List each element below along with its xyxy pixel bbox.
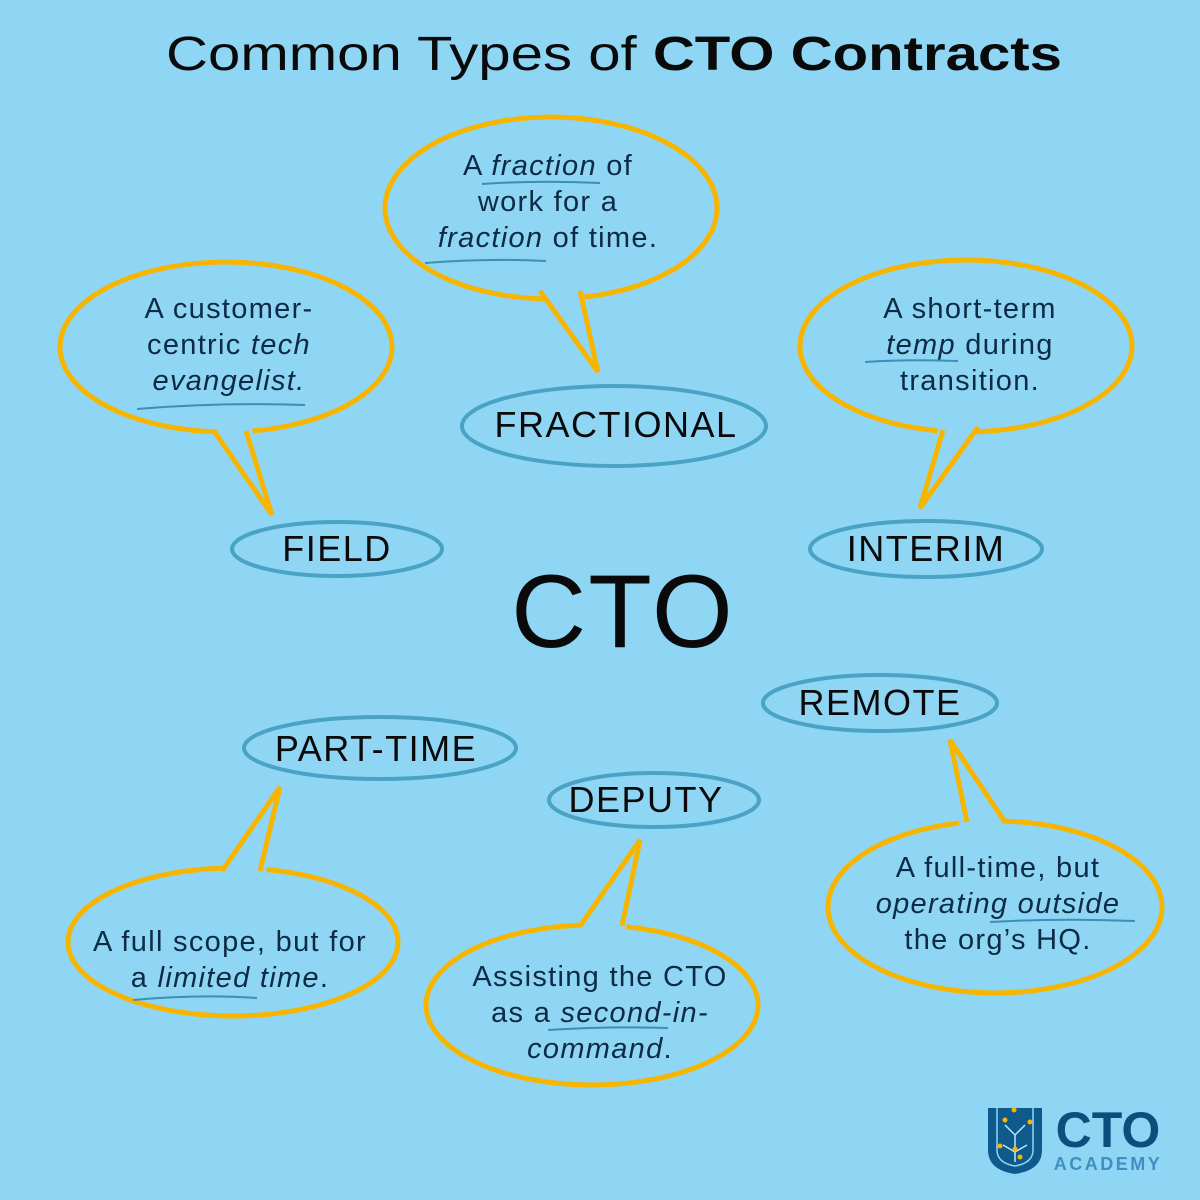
bubble: deputy: Assisting the CTO [472, 961, 728, 993]
label: FIELD [232, 522, 442, 576]
bubble: fractional: fraction of time. [438, 222, 658, 254]
bubble: remote: the org’s HQ. [904, 924, 1092, 956]
title: Common Types of CTO Contracts [166, 28, 1062, 81]
bubble: deputy [426, 840, 758, 1085]
label: FRACTIONAL [462, 386, 766, 466]
bubble: fractional [385, 117, 717, 372]
logo: CTO Academy: CTO [1056, 1102, 1160, 1158]
bubble: interim [800, 260, 1132, 508]
label: INTERIM: INTERIM [847, 528, 1005, 569]
bubble: interim: transition. [900, 365, 1040, 397]
label: INTERIM [810, 521, 1042, 577]
bubble: field: evangelist. [153, 365, 305, 397]
bubble: field: centric tech [147, 329, 311, 361]
bubble: fractional: A fraction of [463, 150, 633, 182]
bubble: interim: A short-term [883, 293, 1057, 325]
bubble: remote: A full-time, but [896, 852, 1100, 884]
label: PART-TIME [244, 717, 516, 779]
label: DEPUTY [549, 773, 759, 827]
logo: CTO Academy [988, 1102, 1162, 1174]
logo: CTO Academy: ACADEMY [1054, 1154, 1162, 1174]
label: PART-TIME: PART-TIME [275, 728, 477, 769]
bubble: part-time: a limited time. [131, 962, 329, 994]
bubble: fractional: work for a [477, 186, 618, 218]
bubble: remote: operating outside [876, 888, 1120, 920]
bubble: field [60, 262, 392, 515]
bubble: interim: temp during [886, 329, 1054, 361]
central heading: CTO: CTO [511, 554, 735, 670]
label: FRACTIONAL: FRACTIONAL [494, 404, 738, 445]
bubble: deputy: command. [527, 1033, 673, 1065]
bubble: field: A customer- [144, 293, 314, 325]
label: DEPUTY: DEPUTY [568, 779, 724, 820]
bubble: part-time [68, 787, 398, 1016]
bubble: deputy: as a second-in- [491, 997, 709, 1029]
label: REMOTE [763, 675, 997, 731]
bubble: remote [828, 740, 1162, 993]
bubble: part-time: A full scope, but for [93, 926, 367, 958]
label: FIELD: FIELD [282, 528, 392, 569]
label: REMOTE: REMOTE [798, 682, 962, 723]
